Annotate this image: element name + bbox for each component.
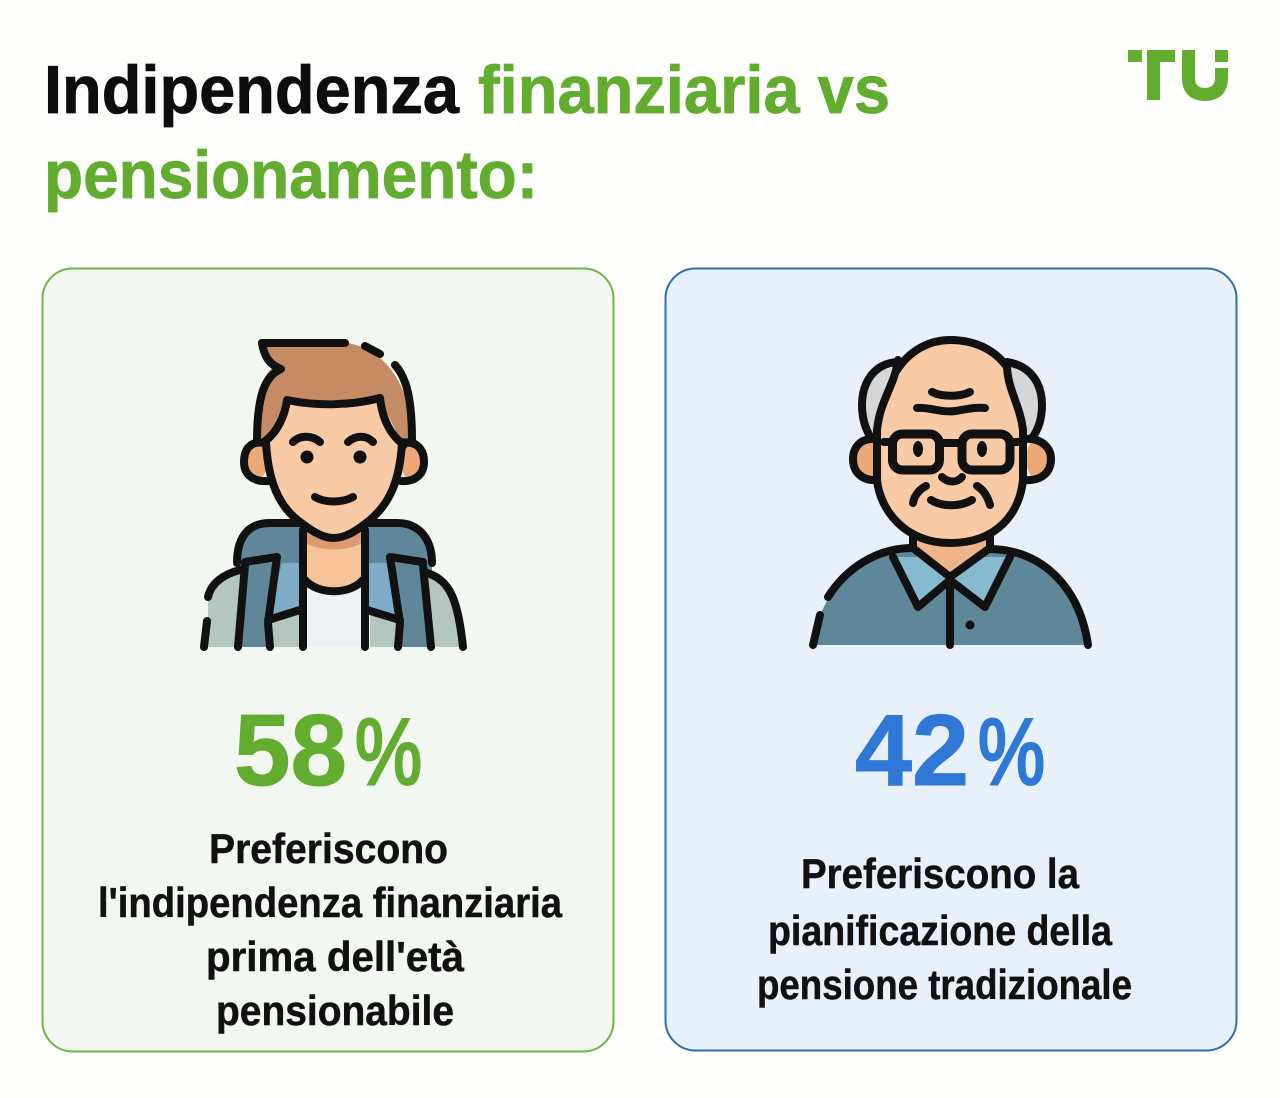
text: independence description: Preferiscono <box>209 825 448 872</box>
stat: 58%: % <box>355 699 422 804</box>
title: finanziaria vs <box>478 52 890 128</box>
title: pensionamento: <box>44 137 538 213</box>
text: independence description: pensionabile <box>216 987 454 1034</box>
text: retirement description: Preferiscono la <box>801 850 1080 897</box>
text: independence description <box>98 825 563 1034</box>
text: independence description: prima dell'età <box>206 933 465 980</box>
title <box>44 52 890 213</box>
stat: 58%: 58 <box>234 695 347 807</box>
text: retirement description: pensione tradizionale <box>757 961 1132 1008</box>
text: retirement description: pianificazione della <box>768 907 1113 954</box>
title: Indipendenza <box>44 52 460 128</box>
text: independence description: l'indipendenza finanziaria <box>98 879 563 926</box>
stat: 58% <box>234 695 422 807</box>
stat: 42%: % <box>978 699 1045 804</box>
panel: traditional retirement <box>666 268 1236 1050</box>
stat: 42%: 42 <box>855 695 969 807</box>
icon: older man with glasses <box>813 340 1088 645</box>
icon: young man with backpack <box>204 343 463 647</box>
logo: TU <box>1128 50 1228 101</box>
stat: 42% <box>855 695 1045 807</box>
panel: financial independence <box>42 268 614 1052</box>
text: retirement description <box>757 850 1132 1008</box>
